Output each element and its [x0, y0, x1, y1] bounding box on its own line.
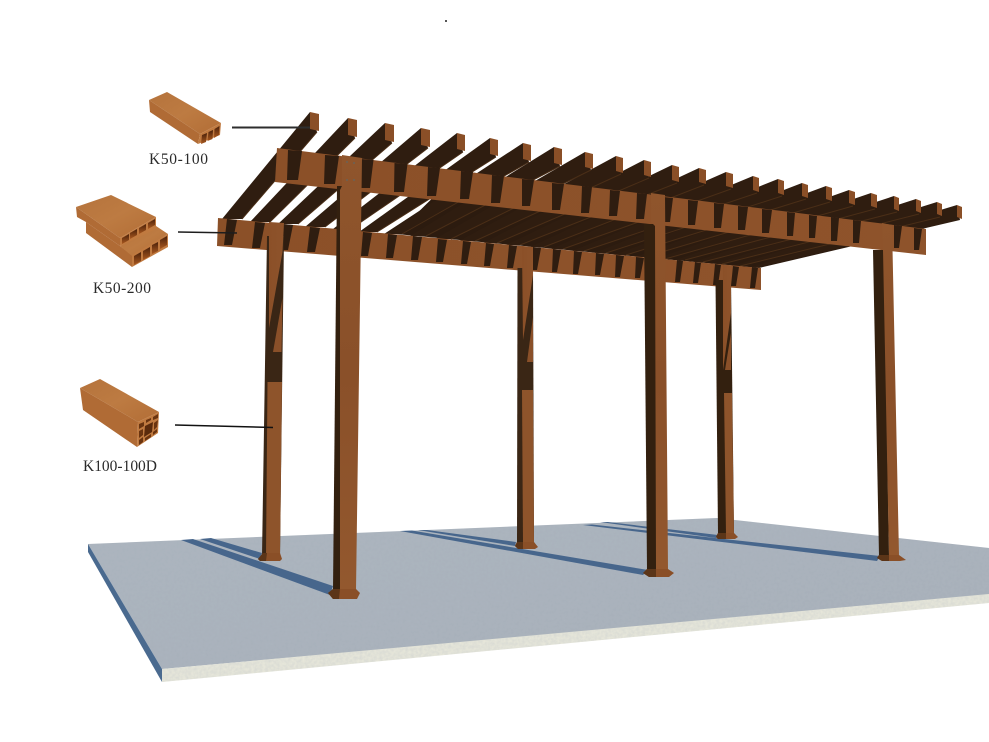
post: front left: [328, 155, 362, 599]
icon: K50-200 profile: [76, 195, 168, 267]
icon: K50-100 profile: [149, 92, 221, 144]
callout: K100-100D post profile: [80, 379, 273, 475]
leader line: K100-100D: [175, 425, 273, 428]
label: K50-200: K50-200: [93, 280, 151, 297]
roof rafters (K50-100): [222, 112, 962, 268]
icon: K100-100D profile: [80, 379, 159, 447]
post: front middle: [643, 193, 674, 577]
small speck at top: [445, 20, 447, 22]
leader line: K50-200: [178, 232, 237, 233]
rafter underside: [396, 171, 925, 268]
front beam (K50-200): [275, 148, 926, 255]
label: K100-100D: K100-100D: [83, 458, 157, 475]
label: K50-100: K50-100: [149, 151, 208, 168]
post: rear left: [258, 222, 284, 561]
callout: K50-200 beam profile: [76, 195, 237, 297]
post: rear middle: [515, 246, 538, 549]
post: rear right: [716, 265, 738, 539]
leader line: K50-100: [232, 126, 310, 128]
concrete ground slab: [88, 518, 989, 682]
post shadows on ground: [181, 522, 880, 595]
callout: K50-100 rafter profile: [149, 92, 310, 168]
post: front right: [873, 223, 906, 561]
rear beam (K50-200): [217, 218, 761, 290]
